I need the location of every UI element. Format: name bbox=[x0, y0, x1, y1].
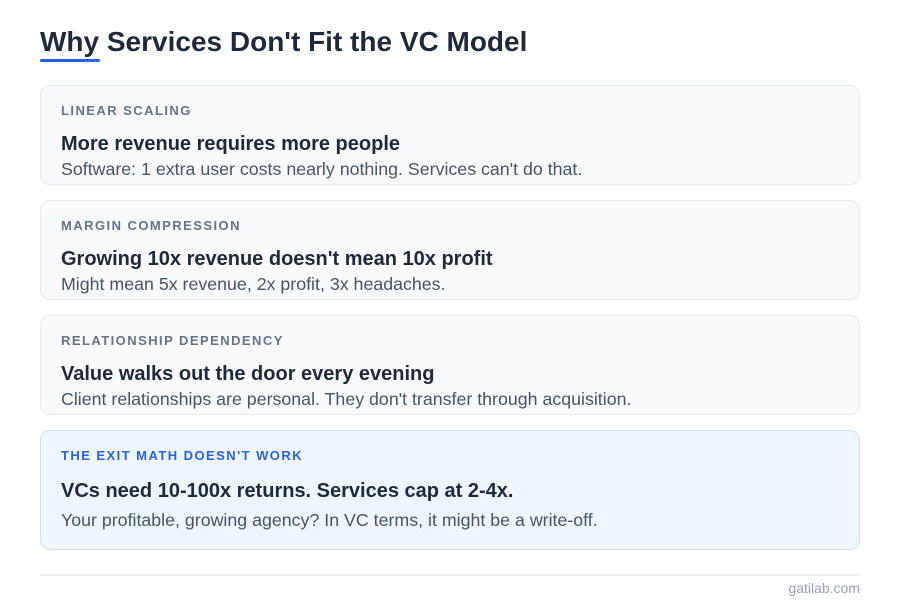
body: Might mean 5x revenue, 2x profit, 3x headaches. bbox=[61, 274, 446, 294]
heading: VCs need 10-100x returns. Services cap at 2-4x. bbox=[61, 480, 513, 502]
label: RELATIONSHIP DEPENDENCY bbox=[61, 333, 284, 348]
panel: linear scaling bbox=[40, 85, 860, 185]
title underline bbox=[40, 59, 100, 62]
heading: Value walks out the door every evening bbox=[61, 363, 434, 385]
title: Why Services Don't Fit the VC Model bbox=[40, 26, 527, 57]
label: THE EXIT MATH DOESN'T WORK bbox=[61, 448, 303, 463]
heading: Growing 10x revenue doesn't mean 10x profit bbox=[61, 248, 493, 270]
label: MARGIN COMPRESSION bbox=[61, 218, 241, 233]
body: Client relationships are personal. They don't transfer through acquisition. bbox=[61, 389, 631, 409]
body: Software: 1 extra user costs nearly nothing. Services can't do that. bbox=[61, 159, 582, 179]
panel: exit math bbox=[40, 430, 860, 550]
heading: More revenue requires more people bbox=[61, 133, 400, 155]
panel: relationship dependency bbox=[40, 315, 860, 415]
footer credit: gatilab.com bbox=[788, 580, 860, 596]
body: Your profitable, growing agency? In VC terms, it might be a write-off. bbox=[61, 510, 598, 530]
label: LINEAR SCALING bbox=[61, 103, 192, 118]
panel: margin compression bbox=[40, 200, 860, 300]
